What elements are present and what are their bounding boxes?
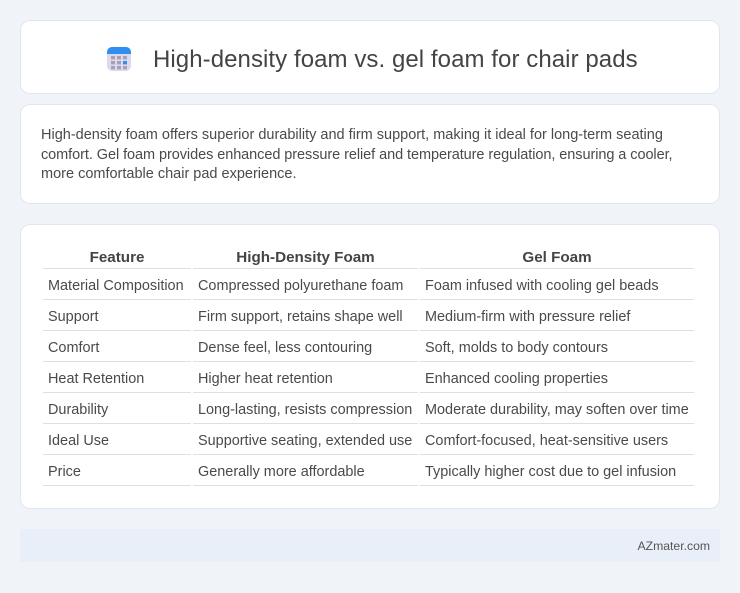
table rows: Firm support, retains shape well (198, 309, 403, 325)
summary text: High-density foam offers superior durability and firm support, making it ideal for long-term seating (41, 127, 663, 143)
table header: Gel Foam (522, 249, 592, 266)
table rows: Soft, molds to body contours (425, 340, 608, 356)
table rows: Moderate durability, may soften over time (425, 402, 689, 418)
table rows: Higher heat retention (198, 371, 333, 387)
table rows: Support (48, 309, 99, 325)
table rows: Enhanced cooling properties (425, 371, 608, 387)
table rows: Comfort (48, 340, 99, 356)
table rows: Heat Retention (48, 371, 144, 387)
table header: High-Density Foam (236, 249, 375, 266)
panel: comparison table (20, 224, 720, 509)
table rows: Long-lasting, resists compression (198, 402, 412, 418)
table rows: Price (48, 464, 81, 480)
panel: summary (20, 104, 720, 204)
footer credit: AZmater.com (638, 539, 710, 553)
summary text (41, 127, 672, 182)
summary text: more comfortable chair pad experience. (41, 166, 296, 182)
table rows: Material Composition (48, 278, 184, 294)
table rows: Typically higher cost due to gel infusion (425, 464, 676, 480)
table rows: Medium-firm with pressure relief (425, 309, 630, 325)
table rows: Durability (48, 402, 108, 418)
footer bar (20, 529, 720, 562)
icon: calendar (107, 47, 131, 71)
title card (20, 20, 720, 94)
table header: Feature (90, 249, 144, 266)
table rows (43, 278, 694, 486)
table rows: Supportive seating, extended use (198, 433, 412, 449)
table header (43, 249, 694, 269)
title: High-density foam vs. gel foam for chair pads (153, 46, 638, 73)
table rows: Comfort-focused, heat-sensitive users (425, 433, 668, 449)
summary text: comfort. Gel foam provides enhanced pressure relief and temperature regulation, ensuring a cooler, (41, 146, 672, 162)
table rows: Foam infused with cooling gel beads (425, 278, 659, 294)
table rows: Generally more affordable (198, 464, 365, 480)
table rows: Dense feel, less contouring (198, 340, 372, 356)
table rows: Ideal Use (48, 433, 109, 449)
table rows: Compressed polyurethane foam (198, 278, 403, 294)
